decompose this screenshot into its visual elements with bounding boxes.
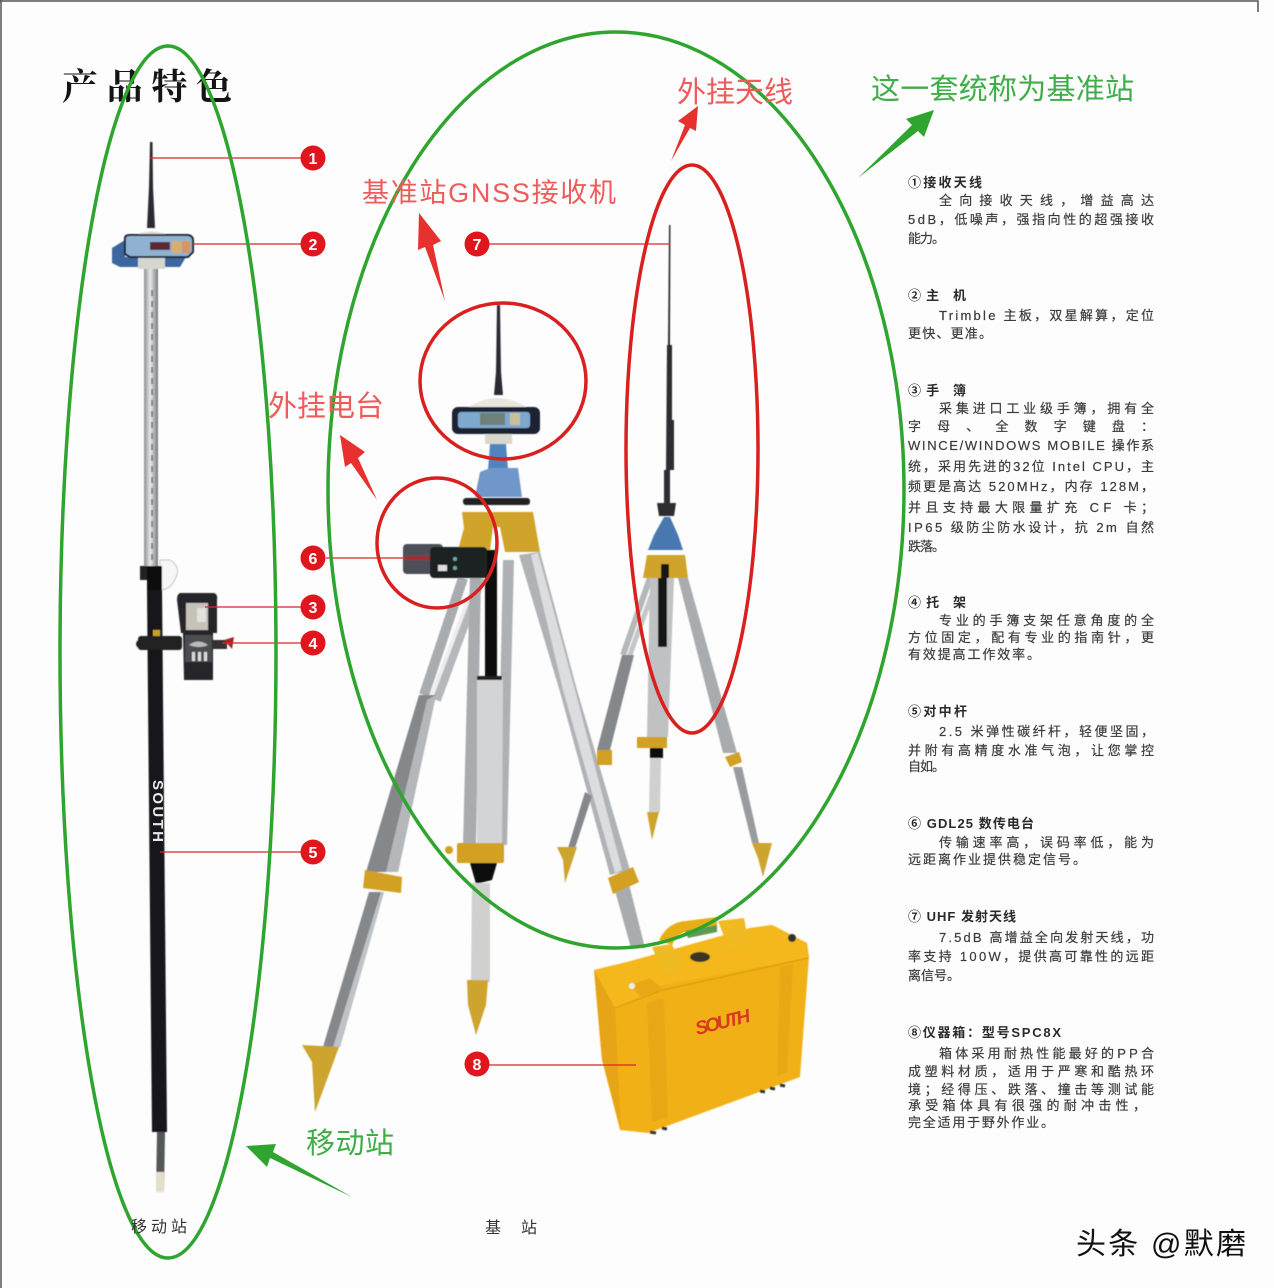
case lid rim bbox=[594, 925, 808, 1008]
item 5: centering pole: ⑤对中杆 bbox=[908, 704, 967, 719]
leader lines bbox=[150, 158, 670, 1065]
small tripod feet bbox=[557, 847, 577, 883]
item 1: receiving antenna: 5dB，低噪声，强指向性的超强接收 bbox=[908, 212, 1154, 227]
middle leg rails bbox=[463, 575, 481, 845]
item 4: bracket: 有效提高工作效率。 bbox=[908, 647, 1040, 662]
item 7: UHF antenna: 率支持 100W，提供高可靠性的远距 bbox=[908, 949, 1154, 964]
badge 7 bbox=[464, 232, 490, 256]
small tribrach bbox=[648, 517, 683, 550]
arrow: green to base station bbox=[858, 110, 934, 178]
red circle: GNSS receiver bbox=[420, 303, 586, 459]
item 1: receiving antenna: 全向接收天线，增益高达 bbox=[939, 193, 1154, 208]
item 8: instrument case: ⑧仪器箱：型号SPC8X bbox=[908, 1025, 1061, 1040]
rover carbon pole bbox=[147, 589, 167, 1132]
badge 1: 1 bbox=[309, 151, 318, 168]
badge 6: 6 bbox=[309, 551, 318, 568]
item 2: host bbox=[908, 288, 1154, 341]
pole SOUTH logo: SOUTH bbox=[149, 780, 166, 842]
item 5: centering pole: 并附有高精度水准气泡，让您掌控 bbox=[908, 743, 1154, 758]
case latches bbox=[652, 944, 681, 975]
small leg clamps bbox=[597, 750, 612, 765]
case ribs bbox=[647, 998, 668, 1122]
case feet bbox=[650, 1085, 785, 1133]
badge 3: 3 bbox=[309, 600, 318, 617]
item 3: controller: 并且支持最大限量扩充 CF 卡； bbox=[908, 500, 1154, 516]
item 1: receiving antenna bbox=[908, 175, 1154, 246]
rover silver pole bbox=[144, 269, 158, 566]
green ellipse: base station bbox=[328, 32, 904, 948]
item 1: receiving antenna: 能力。 bbox=[908, 231, 945, 246]
item 4: bracket: ④托 架 bbox=[908, 595, 966, 610]
item 7: UHF antenna: 7.5dB 高增益全向发射天线，功 bbox=[939, 930, 1154, 945]
badge 5: 5 bbox=[309, 845, 318, 862]
item 3: controller: 统，采用先进的32位 Intel CPU，主 bbox=[908, 459, 1154, 474]
base antenna bbox=[494, 305, 503, 395]
item 3: controller: 频更是高达 520MHz，内存 128M， bbox=[908, 479, 1154, 494]
right leg clamp bbox=[608, 867, 639, 894]
yellow tripod head bbox=[458, 512, 540, 552]
whip antenna bbox=[657, 225, 676, 516]
tripod legs bbox=[323, 550, 645, 1047]
radio bbox=[403, 544, 487, 578]
item 3: controller: 字母、全数字键盘： bbox=[908, 419, 1154, 434]
left leg clamp bbox=[363, 870, 402, 893]
item 4: bracket bbox=[908, 595, 1154, 662]
middle leg clamp bbox=[457, 843, 504, 863]
rover antenna bbox=[147, 142, 155, 228]
label: external radio: 外挂电台 bbox=[268, 390, 384, 423]
rover receiver bbox=[112, 232, 193, 269]
spec list bbox=[908, 175, 1154, 1130]
rover clip bbox=[160, 560, 178, 590]
handheld controller bbox=[177, 593, 217, 680]
large tripod base station bbox=[302, 305, 645, 1112]
tripod feet bbox=[302, 1045, 339, 1112]
item 2: host: ②主 机 bbox=[908, 288, 966, 303]
left leg lower sleeve bbox=[366, 695, 436, 872]
caption: base station: 基 站 bbox=[485, 1219, 537, 1237]
arrow: green to rover bbox=[246, 1144, 352, 1197]
tribrach bbox=[463, 444, 530, 505]
item 6: radio: ⑥ GDL25 数传电台 bbox=[908, 816, 1034, 831]
badge 4 bbox=[300, 630, 326, 656]
clamp bracket bbox=[138, 636, 182, 650]
item 8: instrument case: 境；经得压、跌落、撞击等测试能 bbox=[908, 1082, 1154, 1098]
item 3: controller: 跌落。 bbox=[908, 539, 945, 554]
title: 产品特色 bbox=[62, 59, 232, 110]
item 5: centering pole bbox=[908, 704, 1154, 774]
item 8: instrument case: 成塑料材质，适用于严寒和酷热环 bbox=[908, 1064, 1154, 1079]
right leg bbox=[519, 552, 630, 875]
label: base GNSS receiver: 基准站GNSS接收机 bbox=[362, 178, 616, 208]
item 6: radio bbox=[908, 816, 1154, 867]
arrow: to external antenna bbox=[671, 106, 698, 161]
left leg upper rails bbox=[424, 578, 463, 695]
rover pole equipment bbox=[112, 142, 234, 1192]
small tripod with external antenna bbox=[557, 225, 772, 883]
item 4: bracket: 专业的手簿支架任意角度的全 bbox=[939, 613, 1154, 628]
item 3: controller: WINCE/WINDOWS MOBILE 操作系 bbox=[908, 438, 1154, 453]
red ellipse: external antenna bbox=[626, 165, 758, 733]
label: external antenna: 外挂天线 bbox=[677, 76, 793, 109]
badge 2 bbox=[300, 232, 326, 256]
item 3: controller: ③手 簿 bbox=[908, 383, 966, 398]
badge 6 bbox=[300, 546, 326, 570]
item 5: centering pole: 自如。 bbox=[908, 759, 945, 774]
badge 7: 7 bbox=[473, 237, 482, 254]
green ellipse: rover bbox=[60, 46, 276, 1258]
badge 4: 4 bbox=[309, 636, 318, 653]
case body bbox=[594, 925, 809, 1133]
label: rover: 移动站 bbox=[306, 1127, 394, 1160]
number badges bbox=[300, 146, 490, 1076]
yellow instrument case bbox=[594, 917, 809, 1133]
watermark: 头条 @默磨 bbox=[1076, 1228, 1246, 1261]
badge 2: 2 bbox=[309, 237, 318, 254]
badge 8: 8 bbox=[473, 1057, 482, 1074]
item 8: instrument case: 承受箱体具有很强的耐冲击性， bbox=[908, 1098, 1146, 1113]
item 7: UHF antenna: 离信号。 bbox=[908, 968, 960, 983]
small tripod head bbox=[643, 555, 688, 578]
item 8: instrument case: 完全适用于野外作业。 bbox=[908, 1115, 1054, 1130]
arrow: to GNSS receiver bbox=[418, 213, 445, 301]
small tripod legs bbox=[568, 578, 759, 848]
badge 5 bbox=[300, 840, 326, 864]
case handle bbox=[659, 917, 717, 945]
item 6: radio: 远距离作业提供稳定信号。 bbox=[908, 852, 1086, 867]
badge 3 bbox=[300, 594, 326, 620]
case SOUTH logo: SOUTH bbox=[693, 1006, 754, 1040]
item 3: controller: IP65 级防尘防水设计，抗 2m 自然 bbox=[908, 520, 1154, 535]
item 2: host: 更快、更准。 bbox=[908, 326, 992, 341]
arrow: to radio bbox=[340, 435, 377, 500]
label: whole set is base station: 这一套统称为基准站 bbox=[871, 73, 1134, 106]
item 8: instrument case bbox=[908, 1025, 1154, 1130]
item 3: controller: 采集进口工业级手簿，拥有全 bbox=[939, 401, 1154, 416]
base receiver bbox=[452, 398, 540, 444]
item 1: receiving antenna: ①接收天线 bbox=[908, 175, 982, 190]
item 7: UHF antenna bbox=[908, 909, 1154, 983]
item 5: centering pole: 2.5 米弹性碳纤杆，轻便坚固， bbox=[939, 724, 1154, 739]
item 6: radio: 传输速率高，误码率低，能为 bbox=[939, 835, 1154, 850]
badge 8 bbox=[464, 1052, 490, 1076]
case side face bbox=[594, 970, 621, 1129]
red circle: radio bbox=[377, 478, 497, 608]
item 7: UHF antenna: ⑦ UHF 发射天线 bbox=[908, 909, 1016, 924]
item 2: host: Trimble 主板，双星解算，定位 bbox=[939, 308, 1154, 323]
item 3: controller bbox=[908, 383, 1154, 554]
item 8: instrument case: 箱体采用耐热性能最好的PP合 bbox=[939, 1046, 1154, 1061]
badge 1 bbox=[300, 146, 326, 170]
caption: rover: 移动站 bbox=[131, 1218, 187, 1236]
item 4: bracket: 方位固定，配有专业的指南针，更 bbox=[908, 630, 1154, 645]
